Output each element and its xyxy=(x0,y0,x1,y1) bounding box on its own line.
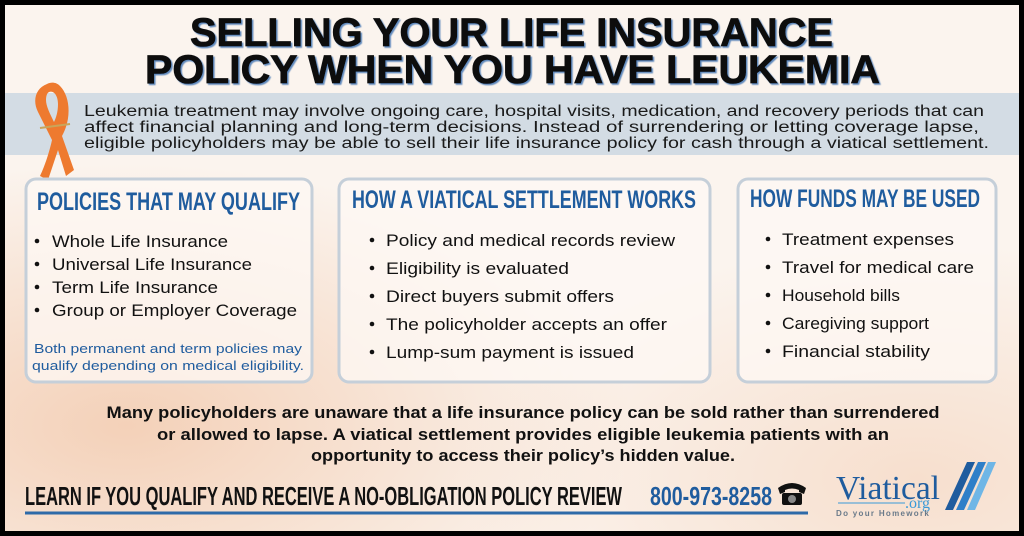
call to action: LEARN IF YOU QUALIFY AND RECEIVE A NO-OBLIGATION POLICY REVIEW xyxy=(25,481,622,511)
logo: Viatical.org: Viatical xyxy=(836,470,940,507)
intro text: Leukemia treatment may involve ongoing care, hospital visits, medication, and recovery periods that can xyxy=(84,103,984,120)
panel: policies that may qualify: Term Life Insurance xyxy=(52,279,218,297)
intro band xyxy=(5,83,1019,180)
closing text xyxy=(106,404,939,465)
closing text: or allowed to lapse. A viatical settlement provides eligible leukemia patients with an xyxy=(157,426,889,444)
panel: policies that may qualify xyxy=(26,179,312,382)
title: SELLING YOUR LIFE INSURANCE xyxy=(190,11,833,55)
panel: policies that may qualify: Group or Employer Coverage xyxy=(52,302,297,320)
logo: Viatical.org: Do your Homework xyxy=(836,509,930,518)
icon: orange ribbon xyxy=(35,83,74,180)
panel: how a viatical settlement works xyxy=(339,179,710,382)
panel: policies that may qualify: POLICIES THAT MAY QUALIFY xyxy=(37,188,300,216)
icon: telephone xyxy=(778,483,806,505)
intro text: eligible policyholders may be able to sell their life insurance policy for cash through a viatical settlement. xyxy=(84,135,989,152)
intro text xyxy=(84,103,989,152)
panel: how a viatical settlement works: The policyholder accepts an offer xyxy=(386,316,668,334)
closing text: Many policyholders are unaware that a life insurance policy can be sold rather than surrendered xyxy=(106,404,939,422)
panel: how funds may be used: Caregiving support xyxy=(782,315,929,333)
panel: how funds may be used: Treatment expenses xyxy=(782,231,954,249)
logo: Viatical.org xyxy=(836,462,996,518)
panel: how a viatical settlement works: Eligibility is evaluated xyxy=(386,260,569,278)
panel: policies that may qualify: Whole Life Insurance xyxy=(52,233,228,251)
panel: how a viatical settlement works: Policy and medical records review xyxy=(386,232,675,250)
panel: how a viatical settlement works: Direct buyers submit offers xyxy=(386,288,614,306)
panel: how funds may be used: Household bills xyxy=(782,287,900,305)
intro text: affect financial planning and long-term decisions. Instead of surrendering or letting coverage lapse, xyxy=(84,119,979,136)
phone number: 800-973-8258 xyxy=(650,481,772,511)
title xyxy=(145,11,880,92)
panel: how funds may be used: Travel for medical care xyxy=(782,259,974,277)
panel: policies that may qualify: Universal Life Insurance xyxy=(52,256,252,274)
panel: how a viatical settlement works: Lump-sum payment is issued xyxy=(386,344,634,362)
title: POLICY WHEN YOU HAVE LEUKEMIA xyxy=(145,48,880,92)
panel: policies that may qualify: qualify depending on medical eligibility. xyxy=(32,358,304,373)
panel: how a viatical settlement works: HOW A VIATICAL SETTLEMENT WORKS xyxy=(352,186,696,214)
logo: Viatical.org: .org xyxy=(905,495,930,512)
closing text: opportunity to access their policy’s hidden value. xyxy=(311,447,735,465)
panel: policies that may qualify: Both permanent and term policies may xyxy=(34,341,303,356)
panel: how funds may be used xyxy=(738,179,996,382)
panel: how funds may be used: Financial stability xyxy=(782,343,931,361)
